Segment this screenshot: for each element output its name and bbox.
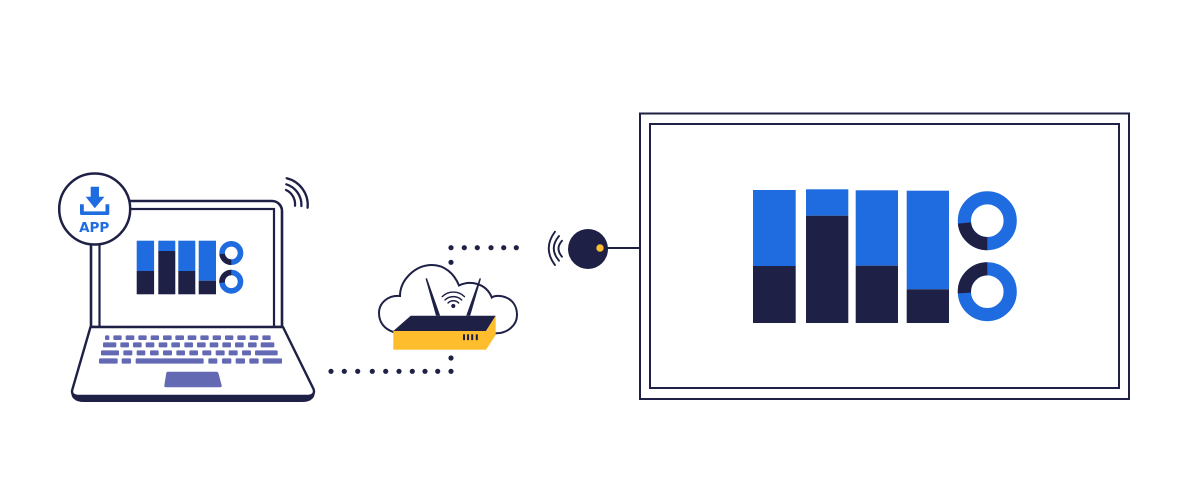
cloud with router (379, 265, 517, 350)
icon: laptop wifi signal (286, 178, 308, 208)
dotted connection: laptop to router (328, 355, 454, 374)
large donut: bottom (964, 269, 1010, 315)
app label: APP (79, 220, 109, 236)
laptop screen (91, 201, 282, 327)
large display (640, 114, 1129, 399)
router box (393, 316, 496, 350)
icon: router wifi (442, 292, 464, 308)
dotted connection: router to receiver (448, 245, 519, 265)
icon: receiver signal arcs (549, 232, 562, 265)
laptop (71, 201, 315, 402)
trackpad (164, 372, 222, 387)
icon: download arrow into tray (80, 187, 109, 215)
router antennas (426, 278, 481, 316)
cable to display (606, 247, 640, 249)
wireless receiver dongle (549, 229, 640, 269)
cloud outline (379, 265, 517, 333)
small chart on laptop screen (137, 241, 240, 294)
laptop base (71, 327, 315, 402)
large stacked bar chart (753, 189, 949, 323)
keyboard (99, 335, 282, 364)
app download badge (59, 174, 130, 244)
large donut: top (964, 198, 1010, 244)
